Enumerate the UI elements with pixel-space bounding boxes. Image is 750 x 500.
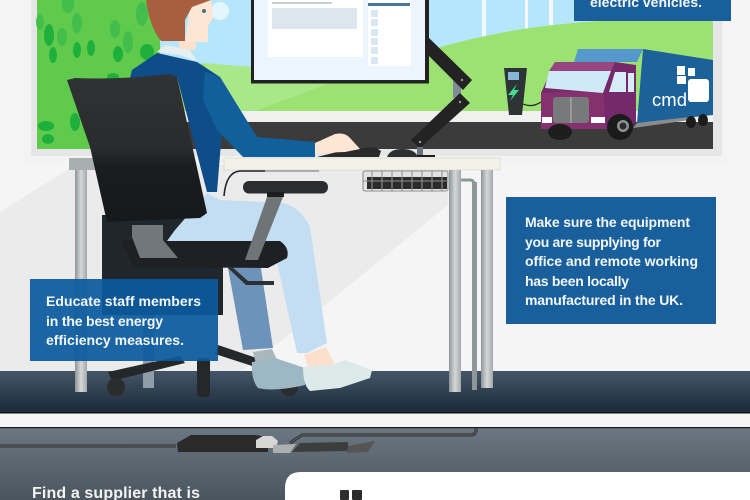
cab — [541, 62, 636, 129]
leg pipe bend — [461, 180, 474, 186]
power cable — [0, 428, 476, 446]
callout: educate staff: Educate staff members — [46, 293, 201, 309]
truck logo: cmd — [652, 90, 687, 110]
keyboard and mouse — [317, 147, 418, 157]
side windows — [609, 72, 634, 92]
rear shoe — [252, 358, 305, 389]
callout: locally manufactured: manufactured in the UK. — [525, 292, 683, 308]
armrest — [228, 181, 328, 285]
callout: educate staff — [30, 279, 218, 361]
grille — [553, 97, 589, 123]
callout: locally manufactured: office and remote working — [525, 253, 698, 269]
sidebar — [368, 0, 411, 66]
rear wheels — [686, 114, 708, 128]
face — [185, 0, 213, 42]
window with outdoor scene — [23, 0, 727, 163]
callout: educate staff: in the best energy — [46, 313, 163, 329]
pavement — [160, 111, 713, 122]
hair — [146, 0, 211, 41]
lighter foreground grass — [205, 63, 330, 111]
desk cable — [224, 171, 265, 196]
chair back — [67, 74, 207, 222]
callout: locally manufactured — [506, 197, 716, 324]
desk legs — [75, 170, 87, 392]
cable tray band — [0, 427, 750, 500]
neck and collar — [157, 38, 197, 61]
road — [160, 122, 713, 149]
wall shadow — [0, 165, 448, 372]
green hill — [37, 18, 713, 125]
sweater body — [130, 53, 240, 192]
desk — [69, 158, 500, 392]
callout: locally manufactured: Make sure the equipment — [525, 214, 690, 230]
EV charging station — [504, 68, 541, 115]
electric vehicles callout — [574, 0, 731, 21]
eye — [202, 9, 206, 13]
sweater arm — [203, 72, 315, 157]
far desk leg — [143, 315, 154, 388]
cab roof — [549, 62, 615, 71]
wind turbines — [482, 0, 553, 38]
seat — [122, 240, 288, 268]
front shoe — [303, 360, 372, 391]
seat cushion — [132, 225, 178, 258]
floor — [0, 371, 750, 414]
document window — [268, 0, 363, 57]
cab hood — [541, 90, 606, 129]
truck logo — [652, 66, 709, 110]
icon: lightning bolt — [508, 84, 519, 101]
connector — [256, 436, 278, 448]
sun cloud — [211, 2, 229, 20]
windshield — [545, 71, 611, 93]
power strip — [177, 435, 268, 452]
person and office chair — [67, 0, 372, 397]
chair base — [107, 345, 298, 397]
tree foliage — [36, 0, 160, 149]
sky — [37, 0, 713, 149]
front wheels — [548, 114, 633, 140]
hand — [315, 134, 360, 153]
computer tower behind chair — [102, 215, 223, 315]
cable basket — [363, 171, 448, 191]
cable clip — [273, 444, 296, 453]
panel icon — [340, 490, 362, 500]
track end — [347, 441, 375, 453]
delivery truck — [541, 49, 713, 140]
callout: locally manufactured: you are supplying for — [525, 234, 662, 250]
callout: locally manufactured: has been locally — [525, 273, 629, 289]
rear leg — [228, 262, 273, 350]
thigh and front leg — [167, 193, 327, 353]
monitor arm — [405, 37, 472, 157]
ankle — [304, 347, 335, 371]
white panel — [285, 472, 750, 500]
headlights — [542, 117, 605, 123]
computer monitor — [251, 0, 429, 84]
cable track — [292, 442, 348, 452]
callout: educate staff: efficiency measures. — [46, 332, 184, 348]
rear ankle — [253, 349, 278, 364]
